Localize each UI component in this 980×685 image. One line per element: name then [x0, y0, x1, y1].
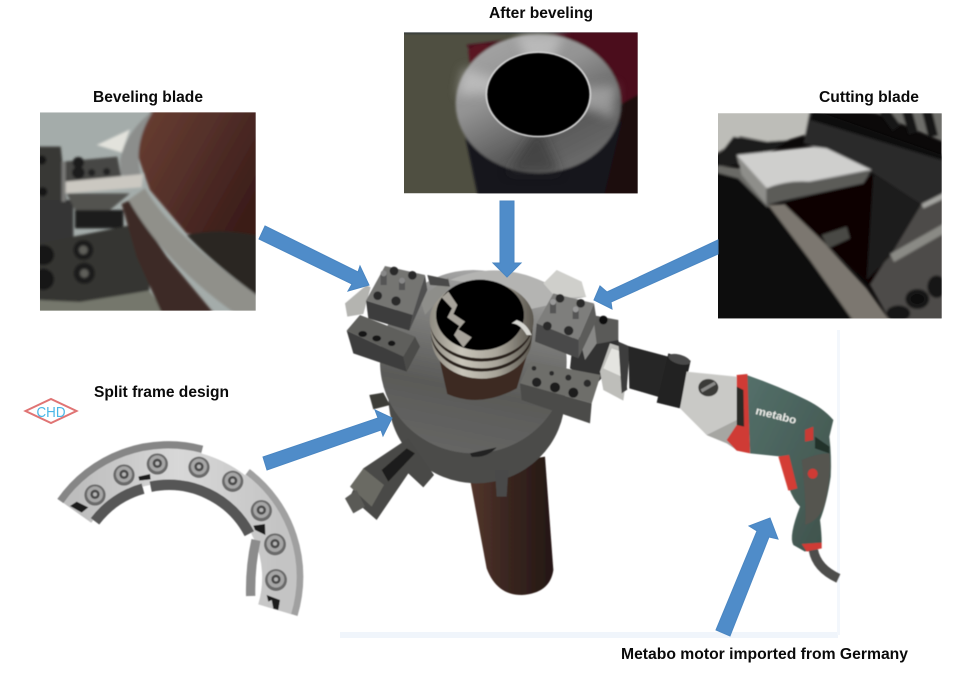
clamping ring body: [380, 270, 567, 483]
heading: cutting blade: Cutting blade: [819, 89, 919, 106]
outer lip upper: [60, 445, 202, 501]
metabo drill: [680, 372, 838, 578]
adjusting screw left: [369, 393, 390, 409]
outer lip right: [248, 472, 300, 615]
top ring back light: [450, 270, 587, 310]
heading: split frame design: Split frame design: [94, 384, 229, 401]
adjusting screw front: [495, 470, 508, 497]
roller bolts: [84, 453, 287, 591]
arrow: split frame to body: [263, 410, 392, 470]
helical chip: [442, 292, 472, 347]
right rear mass: [570, 315, 627, 390]
front carriage block: [520, 362, 601, 423]
split frame ring: [60, 445, 300, 615]
left lower block: [347, 315, 420, 372]
photo: beveling blade: [40, 112, 256, 311]
inner walls: [95, 485, 256, 596]
main machine: pipe beveling machine: [345, 266, 838, 595]
central pipe with steel bands: [430, 280, 534, 400]
heading: metabo motor: Metabo motor imported from Germany: [621, 646, 908, 663]
right tool post block: [535, 293, 597, 358]
heading: after beveling: After beveling: [489, 5, 593, 22]
silver housing: [600, 343, 631, 401]
drill brand label: metabo: [754, 405, 798, 427]
logo: CHD diamond: CHD: [36, 404, 66, 421]
left silver carrier: [345, 285, 371, 317]
bevel surface highlights: [458, 35, 617, 173]
arrow: after beveling to bore: [493, 201, 521, 277]
photo: after beveling: [400, 28, 643, 198]
notches: [70, 474, 280, 610]
drive shaft and collar: [618, 342, 692, 408]
logo: CHD diamond: [26, 399, 76, 423]
arrow: cutting blade to tool post: [594, 240, 718, 309]
side feed handle: [345, 438, 434, 520]
photo: cutting blade: [713, 110, 947, 323]
frame surface: [77, 466, 280, 609]
left tool post block: [366, 266, 450, 331]
lower pipe: [468, 457, 553, 595]
arrow: motor: [716, 518, 778, 636]
heading: beveling blade: Beveling blade: [93, 89, 203, 106]
main machine photo backdrop edge: [340, 330, 840, 638]
arrow: beveling blade to tool post: [259, 226, 369, 291]
